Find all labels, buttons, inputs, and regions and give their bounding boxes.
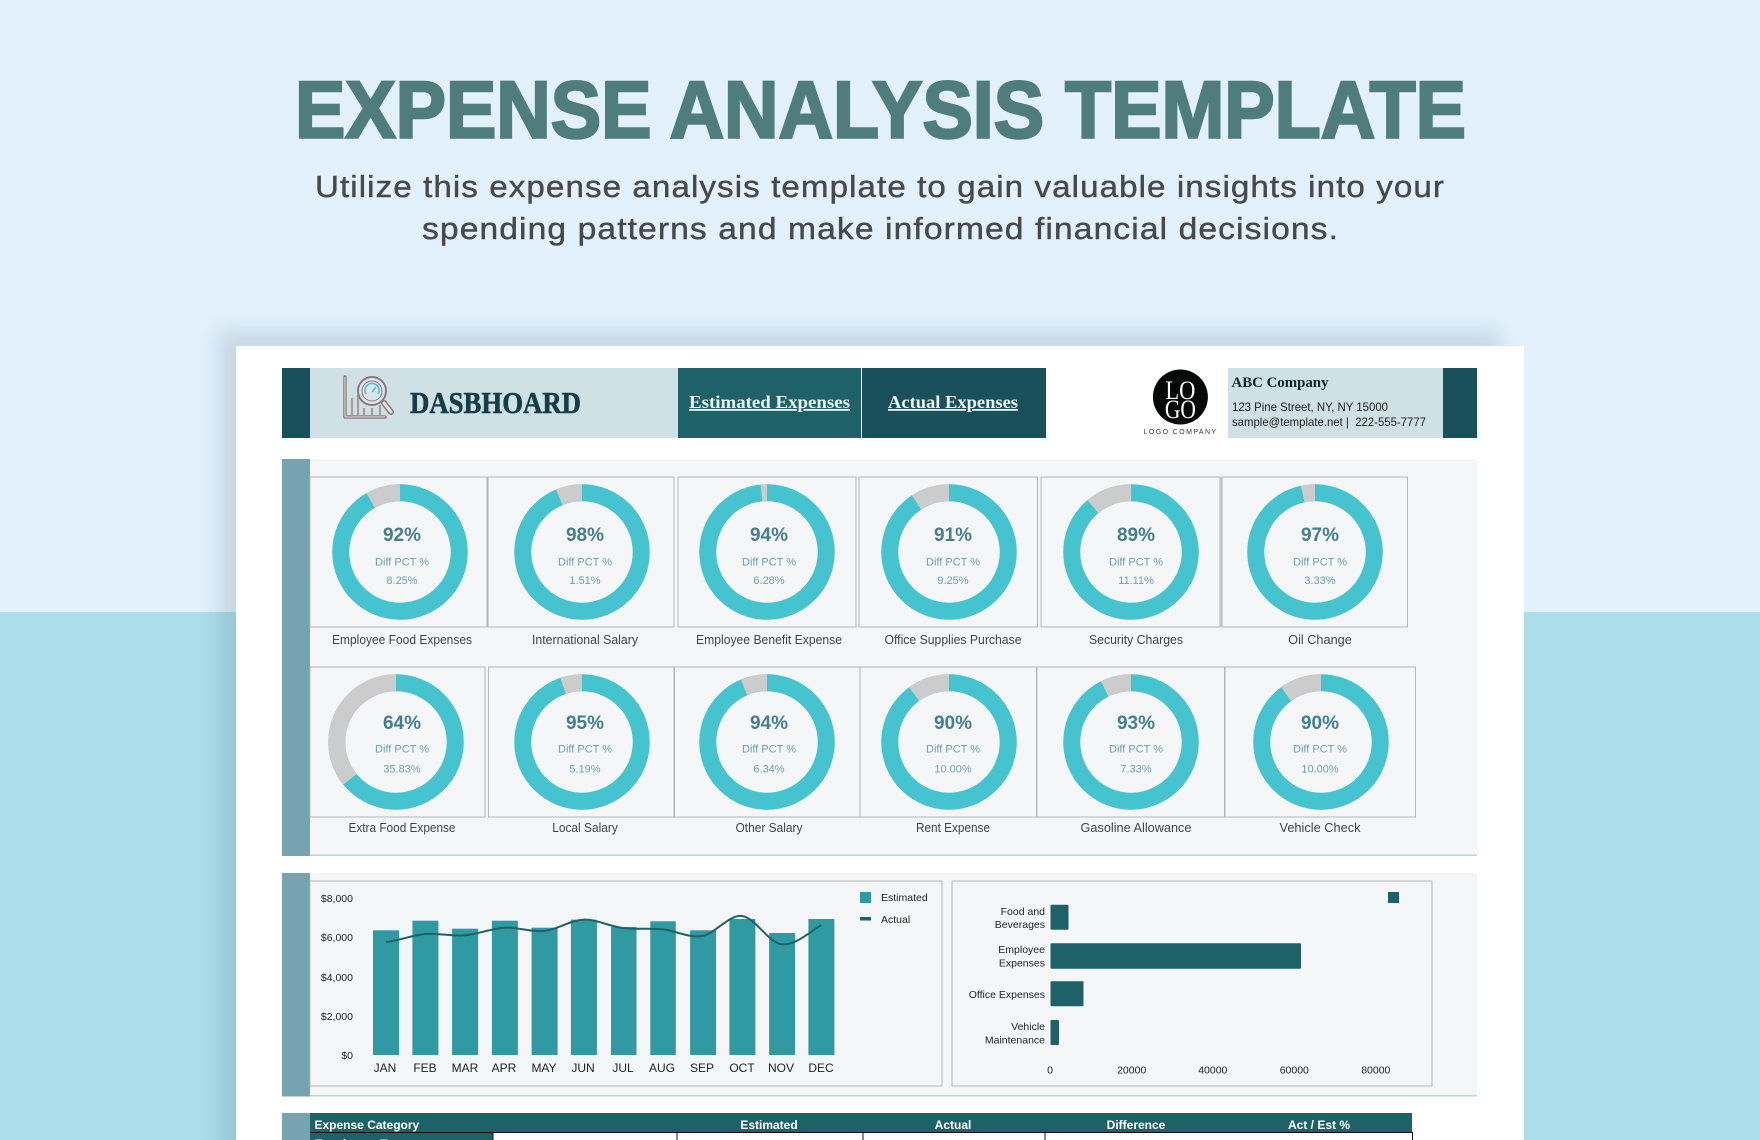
- subtitle: spending patterns and make informed financial decisions.: [422, 211, 1339, 246]
- gauge: extra food expense: 64%: [383, 712, 421, 734]
- gauge: office supplies purchase: 91%: [934, 524, 972, 546]
- month labels: MAY: [531, 1061, 557, 1075]
- gauge: local salary: Diff PCT %: [558, 744, 612, 756]
- legend: Actual: [881, 914, 910, 926]
- month labels: OCT: [729, 1061, 755, 1075]
- actual line: [386, 916, 821, 944]
- dashboard heading: DASBHOARD: [410, 385, 581, 420]
- legend: Estimated: [881, 892, 928, 904]
- gauge: other salary: Other Salary: [736, 821, 803, 835]
- gauge: vehicle check: Diff PCT %: [1293, 744, 1347, 756]
- gauge: employee benefit expense: [678, 477, 856, 647]
- tab: actual expenses: [862, 368, 1046, 438]
- table header: Estimated: [740, 1118, 798, 1132]
- gauge: employee food expenses: Diff PCT %: [375, 556, 429, 568]
- legend: [860, 892, 928, 926]
- x axis labels: 40000: [1198, 1064, 1228, 1076]
- gauge: rent expense: 10.00%: [934, 764, 972, 776]
- x axis labels: 80000: [1361, 1064, 1391, 1076]
- category labels: [969, 906, 1045, 1046]
- logo: [1144, 370, 1216, 436]
- icon: chart with magnifier: [345, 377, 391, 417]
- gauge: extra food expense: 35.83%: [383, 764, 421, 776]
- month labels: JUN: [571, 1061, 595, 1075]
- x axis labels: 20000: [1117, 1064, 1146, 1076]
- gauge: security charges: Security Charges: [1089, 633, 1183, 647]
- y axis labels: $8,000: [321, 893, 353, 905]
- panel: donut gauges: [282, 459, 1477, 856]
- category labels: Food and: [1001, 906, 1045, 918]
- category labels: Employee: [998, 944, 1045, 956]
- gauge: security charges: 11.11%: [1118, 575, 1154, 587]
- month labels: APR: [492, 1061, 517, 1075]
- gauge: extra food expense: Extra Food Expense: [348, 821, 456, 835]
- month labels: AUG: [649, 1061, 675, 1075]
- panel: charts: [282, 873, 1477, 1096]
- gauge: employee benefit expense: Diff PCT %: [742, 556, 796, 568]
- x axis labels: 60000: [1280, 1064, 1309, 1076]
- gauge: gasoline allowance: [1037, 663, 1224, 835]
- gauge: local salary: 95%: [566, 712, 604, 734]
- company details: ABC Company: [1232, 375, 1329, 391]
- chart: expense by category: [952, 881, 1432, 1086]
- card shadow: [218, 330, 1500, 1140]
- category labels: Expenses: [999, 958, 1045, 970]
- gauge: extra food expense: [310, 659, 485, 835]
- gauge: employee food expenses: 92%: [383, 524, 421, 546]
- gauge: employee benefit expense: 94%: [750, 524, 788, 546]
- title: EXPENSE ANALYSIS TEMPLATE: [295, 66, 1466, 156]
- gauge: local salary: Local Salary: [552, 821, 619, 835]
- gauge: oil change: Oil Change: [1288, 633, 1352, 647]
- tab: estimated expenses: Estimated Expenses: [689, 392, 850, 412]
- x axis labels: [1047, 1064, 1391, 1076]
- gauge: rent expense: [860, 659, 1036, 835]
- month labels: FEB: [413, 1061, 437, 1075]
- estimated bars: [373, 919, 834, 1055]
- logo: LO: [1165, 376, 1195, 405]
- gauge: vehicle check: 10.00%: [1301, 764, 1339, 776]
- company details: 123 Pine Street, NY, NY 15000: [1232, 400, 1388, 414]
- gauge: other salary: 6.34%: [753, 764, 785, 776]
- gauge: employee food expenses: [310, 471, 487, 647]
- gauge: other salary: Diff PCT %: [742, 744, 796, 756]
- gauge: security charges: Diff PCT %: [1109, 556, 1163, 568]
- background: lower teal band: [0, 612, 1760, 1140]
- card background: [236, 346, 1524, 1140]
- gauge: vehicle check: Vehicle Check: [1280, 821, 1361, 835]
- gauge: local salary: 5.19%: [569, 764, 601, 776]
- dashboard card: [236, 346, 1524, 1140]
- gauge: vehicle check: 90%: [1301, 712, 1339, 734]
- y axis labels: $0: [341, 1050, 353, 1062]
- gauge: office supplies purchase: [859, 470, 1038, 647]
- gauge: employee benefit expense: Employee Benefit Expense: [696, 633, 842, 647]
- gauge: office supplies purchase: 9.25%: [937, 575, 969, 587]
- month labels: [374, 1061, 834, 1075]
- gauge: extra food expense: Diff PCT %: [375, 744, 429, 756]
- gauge: international salary: Diff PCT %: [558, 556, 612, 568]
- bars: [1050, 905, 1301, 1045]
- gauge: gasoline allowance: 7.33%: [1120, 764, 1152, 776]
- gauge: rent expense: Diff PCT %: [926, 744, 980, 756]
- y axis labels: $6,000: [321, 932, 353, 944]
- gauge: employee benefit expense: 6.28%: [753, 575, 785, 587]
- month labels: MAR: [452, 1061, 479, 1075]
- gauge: international salary: 98%: [566, 524, 604, 546]
- gauge: employee food expenses: 8.25%: [386, 575, 418, 587]
- gauge: security charges: 89%: [1117, 524, 1155, 546]
- gauge: employee food expenses: Employee Food Expenses: [332, 633, 472, 647]
- subtitle: Utilize this expense analysis template to gain valuable insights into your: [315, 169, 1445, 204]
- category labels: Maintenance: [985, 1034, 1045, 1046]
- y axis labels: $4,000: [321, 972, 353, 984]
- table header: Act / Est %: [1288, 1118, 1350, 1132]
- legend swatch: [1388, 892, 1399, 903]
- company details: [1228, 368, 1477, 438]
- category labels: Office Expenses: [969, 989, 1045, 1001]
- month labels: SEP: [690, 1061, 714, 1075]
- gauge: office supplies purchase: Diff PCT %: [926, 556, 980, 568]
- first table row: [310, 1132, 1412, 1140]
- category labels: Beverages: [995, 919, 1045, 931]
- gauge: oil change: 97%: [1301, 524, 1339, 546]
- gauge: rent expense: 90%: [934, 712, 972, 734]
- dashboard header bar: [282, 368, 1477, 438]
- gauge: local salary: [488, 667, 674, 835]
- subtitle: [315, 169, 1445, 246]
- gauge: gasoline allowance: 93%: [1117, 712, 1155, 734]
- table header: Actual: [935, 1118, 971, 1132]
- gauge: oil change: 3.33%: [1304, 575, 1336, 587]
- table header: [314, 1118, 1350, 1132]
- gauge: rent expense: Rent Expense: [916, 821, 990, 835]
- expense table: [282, 1113, 1412, 1140]
- logo: LOGO COMPANY: [1144, 429, 1216, 436]
- gauge: international salary: 1.51%: [569, 575, 601, 587]
- gauge: international salary: [488, 475, 674, 647]
- category labels: Vehicle: [1011, 1021, 1045, 1033]
- logo: GO: [1165, 395, 1196, 424]
- month labels: DEC: [808, 1061, 834, 1075]
- tab: actual expenses: Actual Expenses: [888, 392, 1018, 412]
- table header: Difference: [1107, 1118, 1166, 1132]
- chart: monthly estimated vs actual: [310, 881, 942, 1086]
- month labels: JUL: [612, 1061, 634, 1075]
- gauge: vehicle check: [1225, 659, 1416, 835]
- month labels: NOV: [768, 1061, 794, 1075]
- gauge: security charges: [1041, 469, 1222, 647]
- gauge: international salary: International Salary: [532, 633, 639, 647]
- gauge: gasoline allowance: Diff PCT %: [1109, 744, 1163, 756]
- gauge: other salary: 94%: [750, 712, 788, 734]
- gauge: gasoline allowance: Gasoline Allowance: [1080, 821, 1192, 835]
- gauge: office supplies purchase: Office Supplies Purchase: [884, 633, 1022, 647]
- x axis labels: 0: [1047, 1064, 1053, 1076]
- company details: sample@template.net | 222-555-7777: [1232, 415, 1426, 429]
- month labels: JAN: [374, 1061, 396, 1075]
- y axis labels: $2,000: [321, 1011, 353, 1023]
- gauge: other salary: [674, 664, 860, 835]
- gauge: oil change: [1222, 477, 1408, 647]
- table header: Expense Category: [314, 1118, 420, 1132]
- y axis labels: [321, 893, 353, 1062]
- gauge: oil change: Diff PCT %: [1293, 556, 1347, 568]
- tab: estimated expenses: [678, 368, 861, 438]
